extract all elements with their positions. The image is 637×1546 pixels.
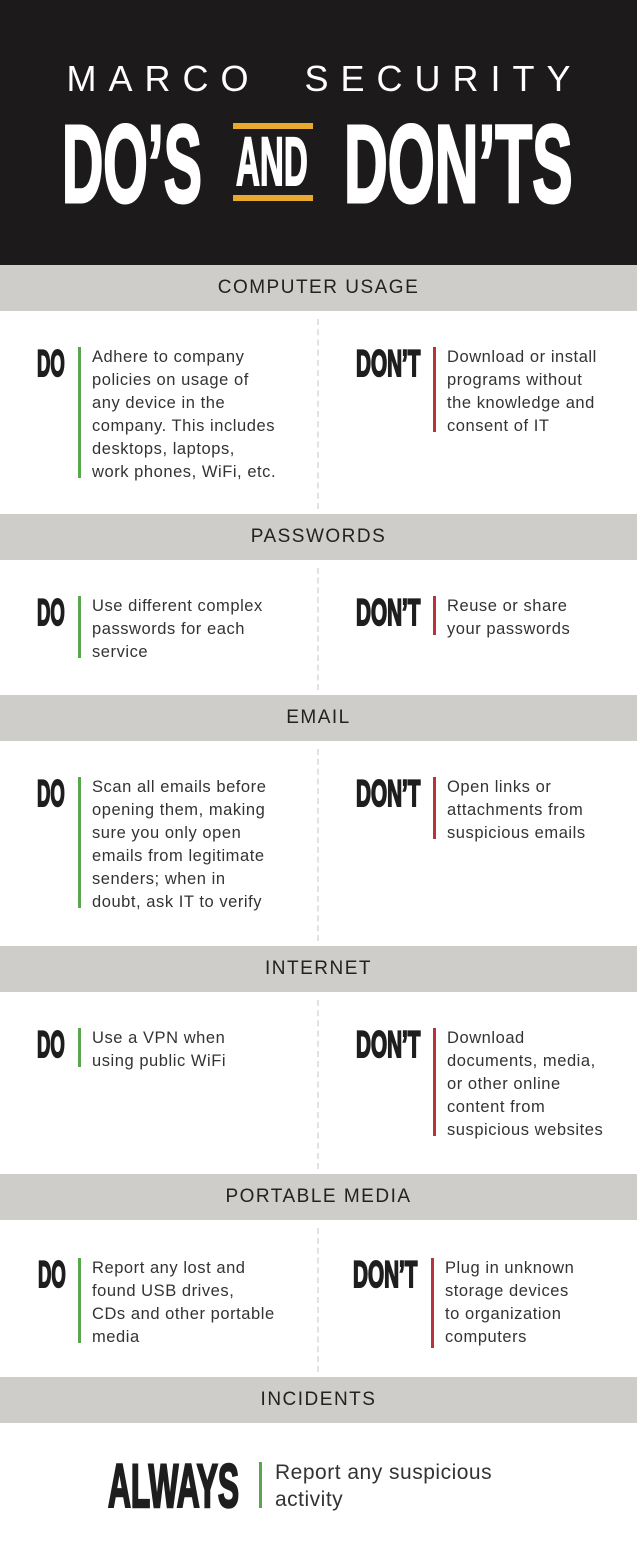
band: internet: INTERNET [265,958,372,979]
do text [78,347,276,481]
dont text: your passwords [447,620,570,638]
always text [259,1461,492,1511]
panel: email [37,749,586,941]
dont text: computers [445,1328,527,1346]
do text: CDs and other portable [92,1305,275,1323]
dont text: Open links or [447,778,551,796]
do text: senders; when in [92,870,226,888]
dont text: or other online [447,1075,561,1093]
dont text: Download or install [447,348,597,366]
dont label: DON’T [356,773,420,814]
band: computer usage [0,265,637,311]
dont label: DON’T [356,1024,420,1065]
dont text: content from [447,1098,545,1116]
do text: any device in the [92,394,225,412]
band: email: EMAIL [286,707,351,728]
title: and with bars: AND [236,123,308,200]
panel: incidents [108,1452,492,1520]
band: internet [0,946,637,992]
do text: passwords for each [92,620,245,638]
do text: Adhere to company [92,348,244,366]
band: portable media: PORTABLE MEDIA [225,1186,412,1207]
dont text: the knowledge and [447,394,595,412]
do text: media [92,1328,140,1346]
dont text: Plug in unknown [445,1259,574,1277]
dont text [431,1258,574,1348]
do text [78,1028,226,1070]
dont text: suspicious websites [447,1121,603,1139]
band: email [0,695,637,741]
do label: DO [37,343,65,384]
band: passwords [0,514,637,560]
band: passwords: PASSWORDS [251,526,386,547]
dont text: storage devices [445,1282,569,1300]
do text: work phones, WiFi, etc. [92,463,276,481]
dont text: Download [447,1029,525,1047]
title: marco security: MARCO SECURITY [66,58,583,99]
do text: opening them, making [92,801,265,819]
panel: portable media [38,1228,574,1372]
do text: Scan all emails before [92,778,266,796]
dont text: to organization [445,1305,562,1323]
dont label: DON’T [356,343,420,384]
dont text [433,1028,603,1139]
do label: DO [37,592,65,633]
band: incidents: INCIDENTS [261,1389,376,1410]
do text: found USB drives, [92,1282,234,1300]
title: don'ts: DON’TS [344,103,573,226]
dont label: DON’T [353,1254,417,1295]
do text: using public WiFi [92,1052,226,1070]
panel: computer usage [37,319,597,509]
dont text: consent of IT [447,417,550,435]
dont text: suspicious emails [447,824,586,842]
dont text: documents, media, [447,1052,596,1070]
do text: emails from legitimate [92,847,265,865]
band: incidents [0,1377,637,1423]
dont text [433,347,597,435]
do text: Use a VPN when [92,1029,225,1047]
panel: passwords [37,568,570,690]
dont text: Reuse or share [447,597,568,615]
band: portable media [0,1174,637,1220]
do text [78,596,263,661]
do text: Use different complex [92,597,263,615]
title: do's: DO’S [62,103,202,226]
dont text: programs without [447,371,582,389]
do label: DO [37,773,65,814]
do text: sure you only open [92,824,241,842]
dont label: DON’T [356,592,420,633]
do text: Report any lost and [92,1259,246,1277]
dont text [433,777,586,842]
do text: policies on usage of [92,371,249,389]
do text: company. This includes [92,417,275,435]
always label: ALWAYS [108,1452,239,1520]
do text: desktops, laptops, [92,440,235,458]
band: computer usage: COMPUTER USAGE [218,277,419,298]
do text: doubt, ask IT to verify [92,893,262,911]
header [0,0,637,265]
always text: Report any suspicious [275,1461,492,1484]
dont text: attachments from [447,801,583,819]
dont text [433,596,570,638]
always text: activity [275,1488,343,1511]
panel: internet [37,1000,603,1169]
do label: DO [38,1254,66,1295]
do text [78,1258,275,1346]
do text [78,777,266,911]
do text: service [92,643,148,661]
do label: DO [37,1024,65,1065]
